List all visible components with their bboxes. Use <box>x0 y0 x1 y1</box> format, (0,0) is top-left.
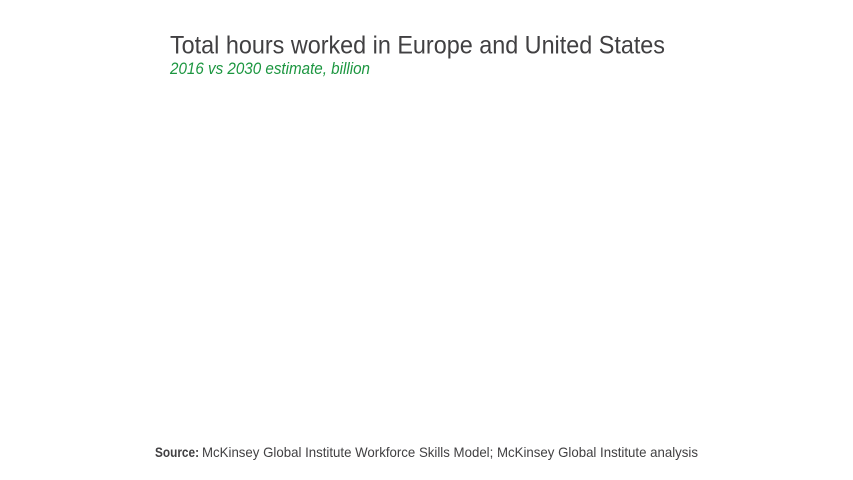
source note: Source: <box>155 444 199 460</box>
subtitle: 2016 vs 2030 estimate, billion <box>169 60 370 78</box>
title: Total hours worked in Europe and United States <box>170 32 665 60</box>
source note: McKinsey Global Institute Workforce Skills Model; McKinsey Global Institute analysis <box>202 444 698 460</box>
